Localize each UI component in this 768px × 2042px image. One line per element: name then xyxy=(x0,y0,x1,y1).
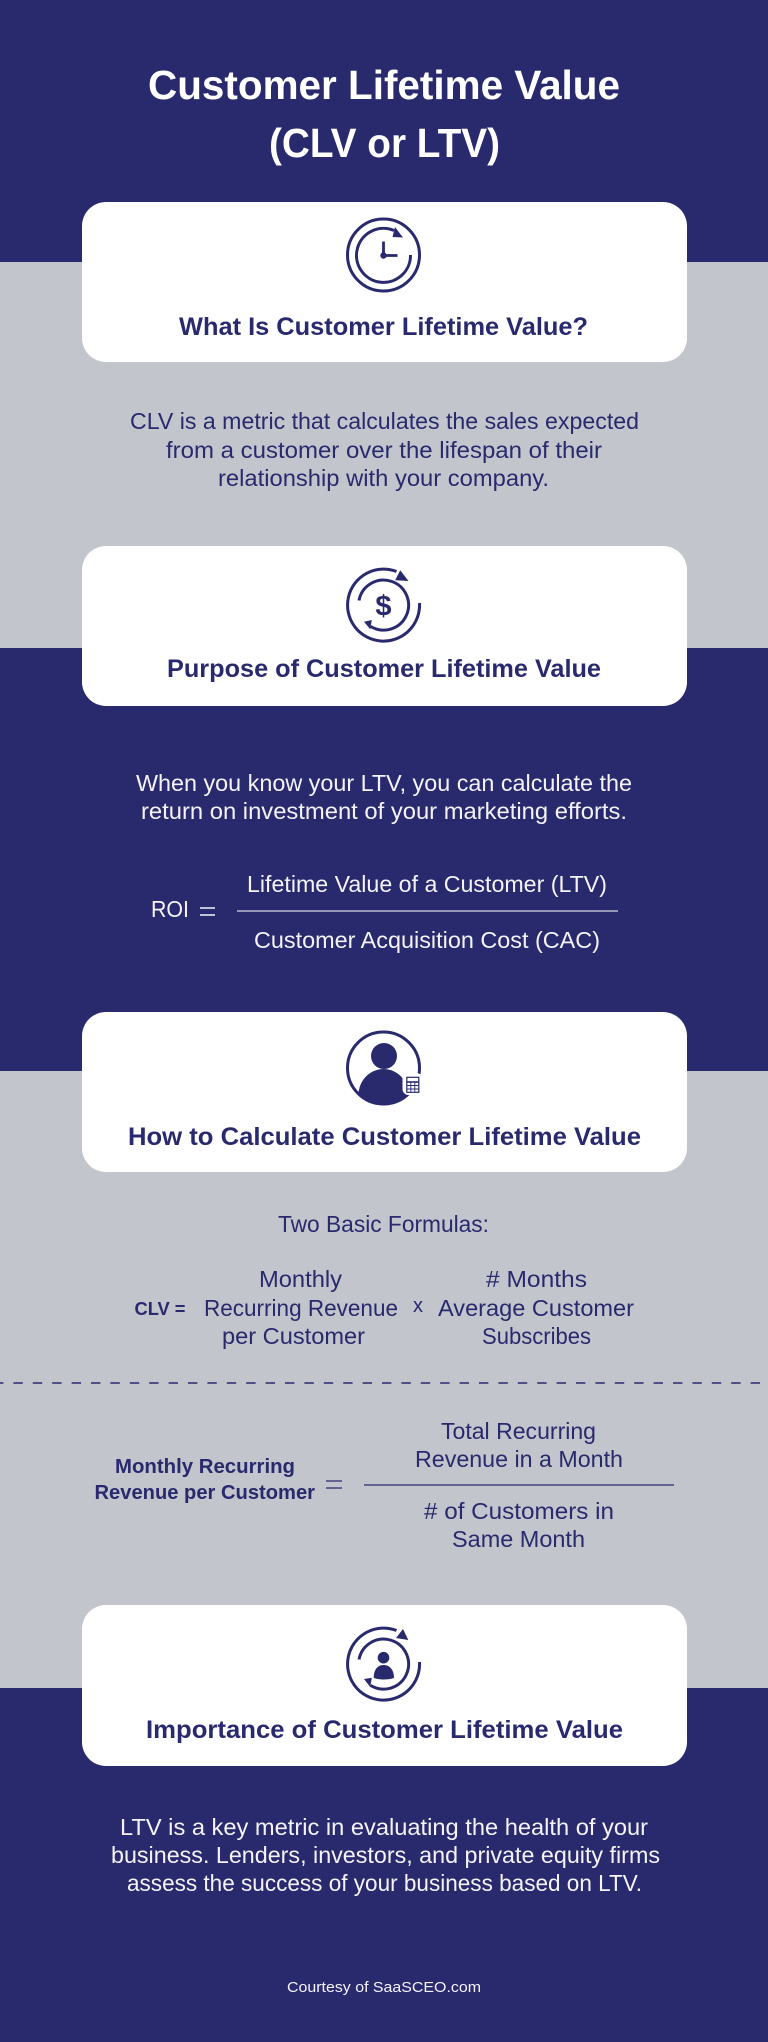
text block: purpose description: return on investment of your marketing efforts. xyxy=(141,798,627,824)
panel: how to calculate xyxy=(82,1012,687,1172)
heading: importance: Importance of Customer Lifetime Value xyxy=(146,1716,623,1744)
icon: dollar with circular arrows: $ xyxy=(375,590,392,622)
title: Customer Lifetime Value xyxy=(148,62,620,108)
formula: CLV: # Months xyxy=(486,1266,587,1292)
background: grey band 1 xyxy=(0,262,768,648)
heading: what is CLV: What Is Customer Lifetime Value? xyxy=(179,313,588,341)
icon: customer with calculator xyxy=(348,1032,422,1105)
panel: what is customer lifetime value xyxy=(82,202,687,362)
formula: monthly recurring revenue per customer: Monthly Recurring xyxy=(115,1455,295,1478)
text block: importance description: LTV is a key metric in evaluating the health of your xyxy=(120,1814,648,1840)
icon: customer with circular arrows xyxy=(348,1628,420,1700)
text block: CLV definition: relationship with your company. xyxy=(218,465,549,491)
formula: ROI: ROI xyxy=(151,896,189,922)
icon: dollar with circular arrows xyxy=(348,569,420,641)
formula: monthly recurring revenue per customer: Revenue in a Month xyxy=(415,1446,623,1472)
text block: CLV definition: from a customer over the lifespan of their xyxy=(166,437,602,463)
text block: importance description: business. Lenders, investors, and private equity firms xyxy=(111,1842,660,1868)
title xyxy=(148,62,620,166)
formula: CLV: Monthly xyxy=(259,1266,342,1292)
formula: ROI: Lifetime Value of a Customer (LTV) xyxy=(247,871,607,897)
formula: monthly recurring revenue per customer: Revenue per Customer xyxy=(94,1481,315,1504)
footer credit: Courtesy of SaaSCEO.com xyxy=(287,1979,481,1996)
text block: purpose description: When you know your LTV, you can calculate the xyxy=(136,770,632,796)
subheading: two basic formulas: Two Basic Formulas: xyxy=(278,1211,489,1237)
heading: how to calculate: How to Calculate Customer Lifetime Value xyxy=(128,1123,641,1151)
background: navy band 2 xyxy=(0,648,768,1071)
background: top navy band xyxy=(0,0,768,262)
heading: purpose: Purpose of Customer Lifetime Value xyxy=(167,655,601,683)
text block: importance description xyxy=(111,1814,660,1896)
formula: monthly recurring revenue per customer xyxy=(94,1418,674,1552)
panel: purpose of customer lifetime value xyxy=(82,546,687,706)
formula: CLV: Recurring Revenue xyxy=(204,1295,398,1321)
background: grey band 2 xyxy=(0,1071,768,1688)
background: bottom navy band xyxy=(0,1688,768,2042)
text block: purpose description xyxy=(136,770,632,824)
title: (CLV or LTV) xyxy=(269,120,500,166)
formula: monthly recurring revenue per customer: Total Recurring xyxy=(441,1418,596,1444)
text block: importance description: assess the success of your business based on LTV. xyxy=(127,1870,642,1896)
icon: clock with arrow xyxy=(348,219,420,291)
formula: ROI: Customer Acquisition Cost (CAC) xyxy=(254,927,600,953)
formula: monthly recurring revenue per customer: Same Month xyxy=(452,1526,585,1552)
formula: monthly recurring revenue per customer: # of Customers in xyxy=(424,1498,614,1524)
panel: importance xyxy=(82,1605,687,1766)
formula: CLV: x xyxy=(413,1295,423,1317)
formula: CLV: per Customer xyxy=(222,1323,365,1349)
formula: CLV: Average Customer xyxy=(438,1295,634,1321)
formula: CLV: CLV = xyxy=(134,1299,186,1319)
formula: CLV xyxy=(134,1266,634,1349)
formula: ROI xyxy=(151,871,618,953)
text block: CLV definition xyxy=(130,408,639,491)
formula: CLV: Subscribes xyxy=(482,1323,591,1349)
text block: CLV definition: CLV is a metric that calculates the sales expected xyxy=(130,408,639,434)
